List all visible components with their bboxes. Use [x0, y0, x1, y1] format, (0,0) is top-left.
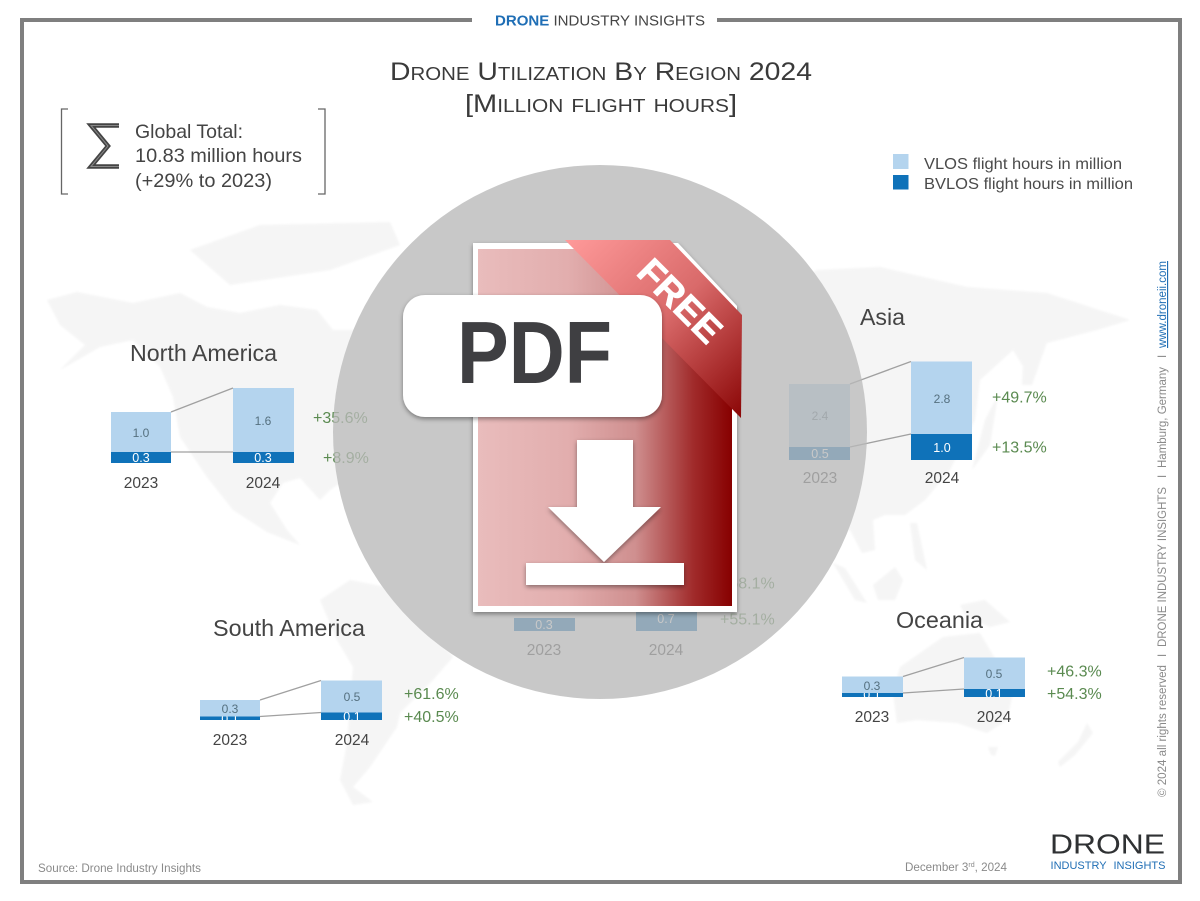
- side copyright text: I: [1157, 475, 1169, 478]
- global total callout: [62, 109, 325, 194]
- chart: Oceania: 0.1: [863, 688, 881, 702]
- grey overlay circle: [333, 165, 867, 699]
- global total text: Global Total:: [135, 121, 243, 143]
- chart: Asia: 0.5: [811, 447, 829, 461]
- header brand: DRONE INDUSTRY INSIGHTS: [495, 14, 705, 30]
- legend: BVLOS flight hours in million: [924, 176, 1133, 193]
- date: , 2024: [975, 862, 1008, 874]
- chart: South America: 0.5: [344, 690, 361, 704]
- chart: Africa and Middle East (hidden behind circle): 0.3: [535, 618, 553, 632]
- global total text: (+29% to 2023): [135, 170, 272, 192]
- side copyright text: © 2024 all rights reserved: [1157, 665, 1169, 797]
- chart: Oceania: 2023: [855, 709, 889, 726]
- legend: [893, 154, 1133, 193]
- free ribbon: [565, 240, 742, 418]
- chart: South America: +40.5%: [404, 709, 459, 726]
- side copyright text: Hamburg, Germany: [1157, 367, 1169, 468]
- chart: Asia: 2023: [803, 470, 837, 487]
- side copyright text: [1157, 261, 1169, 797]
- chart: Oceania: +54.3%: [1047, 686, 1102, 703]
- chart: Oceania: Oceania: [896, 607, 983, 633]
- chart: Asia: +49.7%: [992, 390, 1047, 406]
- chart: Asia: +13.5%: [992, 440, 1047, 456]
- source note: Source: Drone Industry Insights: [38, 863, 201, 875]
- chart: Asia: [789, 304, 1047, 487]
- chart: Africa and Middle East (hidden behind circle): 0.7: [657, 612, 675, 626]
- chart: Oceania: 0.3: [864, 679, 881, 693]
- PDF label: [403, 295, 662, 417]
- title: Drone Utilization By Region 2024: [390, 58, 812, 86]
- global total text: 10.83 million hours: [135, 145, 302, 167]
- logo: [1050, 828, 1166, 872]
- chart: Asia: 1.0: [933, 441, 951, 455]
- chart: Oceania: 0.1: [985, 687, 1003, 701]
- chart: North America: +8.9%: [323, 450, 369, 467]
- world map background: [47, 222, 1130, 805]
- side copyright text: www.droneii.com: [1157, 261, 1169, 349]
- chart: Africa and Middle East (hidden behind circle): 2024: [649, 642, 684, 659]
- PDF label: PDF: [457, 303, 612, 402]
- chart: Oceania: 0.5: [986, 667, 1003, 681]
- chart: Oceania: [842, 607, 1102, 726]
- icon: sigma: [91, 126, 119, 166]
- chart: South America: South America: [213, 615, 365, 641]
- download arrow: [526, 440, 684, 585]
- chart: North America: 2024: [246, 475, 281, 492]
- chart: South America: 0.3: [222, 702, 239, 716]
- side copyright text: I: [1157, 654, 1169, 657]
- map mask behind circle: [333, 165, 867, 699]
- chart: North America: [111, 340, 369, 492]
- document sheet: [473, 243, 737, 612]
- logo: INDUSTRY INSIGHTS: [1050, 860, 1166, 872]
- side copyright text: DRONE INDUSTRY INSIGHTS: [1157, 487, 1169, 647]
- chart: Asia: 2.8: [934, 392, 951, 406]
- chart: South America: 0.1: [343, 710, 361, 724]
- free ribbon: FREE: [629, 251, 730, 352]
- chart: North America: 2023: [124, 475, 158, 492]
- global total text: [135, 121, 302, 192]
- chart: Africa and Middle East (hidden behind circle): 2023: [527, 642, 561, 659]
- date: rd: [968, 862, 975, 869]
- date: December 3: [905, 862, 968, 874]
- chart: Africa and Middle East (hidden behind circle): +58.1%: [720, 576, 775, 592]
- chart: North America: +35.6%: [313, 410, 368, 427]
- chart: North America: North America: [130, 340, 277, 366]
- chart: Asia: 2.4: [812, 409, 829, 423]
- chart: North America: 1.0: [133, 426, 150, 440]
- chart: South America: 2024: [335, 732, 370, 749]
- side copyright text: I: [1157, 355, 1169, 358]
- chart: North America: 0.3: [132, 451, 150, 465]
- chart: South America: 2023: [213, 732, 247, 749]
- chart: South America: +61.6%: [404, 686, 459, 703]
- chart: Asia: 2024: [925, 470, 960, 487]
- title: [390, 58, 812, 118]
- chart: South America: 0.1: [221, 712, 239, 726]
- chart: Asia: Asia: [860, 304, 905, 330]
- logo: DRONE: [1050, 828, 1165, 860]
- chart: Africa and Middle East (hidden behind circle): +55.1%: [720, 612, 775, 628]
- chart: North America: 1.6: [255, 414, 272, 428]
- chart: Africa and Middle East (hidden behind circle): [514, 576, 775, 659]
- chart: South America: [200, 615, 459, 749]
- legend: VLOS flight hours in million: [924, 156, 1122, 173]
- icon: PDF download: [403, 240, 742, 612]
- title: [Million flight hours]: [465, 90, 737, 118]
- chart: Oceania: 2024: [977, 709, 1012, 726]
- chart: Oceania: +46.3%: [1047, 664, 1102, 680]
- chart: North America: 0.3: [254, 451, 272, 465]
